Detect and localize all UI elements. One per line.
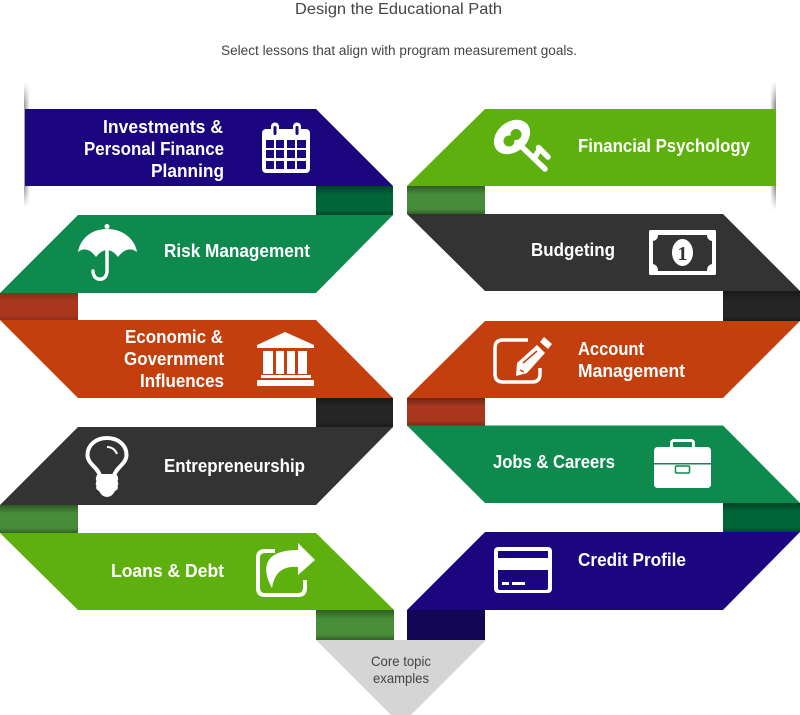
fold: dark to orange right (723, 291, 800, 321)
icon: key (487, 113, 548, 169)
panel: entrepreneurship (0, 427, 393, 505)
fold: orange to green right (407, 398, 485, 426)
panel: jobs and careers: Jobs & Careers (493, 452, 615, 472)
icon: dollar bill (649, 230, 716, 275)
panel: investments and personal finance planning: Personal Finance (84, 139, 224, 159)
icon: light bulb (88, 438, 126, 497)
fold: lime to dark right (407, 186, 485, 214)
fold: navy to green left (316, 186, 393, 215)
fold: green to orange left (0, 293, 78, 320)
panel: account management: Management (578, 361, 685, 381)
fold: green to navy right (723, 503, 800, 532)
icon: credit card (494, 547, 552, 593)
panel: core topic examples: examples (373, 670, 429, 686)
panel: loans and debt: Loans & Debt (111, 561, 224, 581)
panel: risk management (0, 215, 393, 293)
panel: economic and government influences: Government (124, 349, 224, 369)
panel: budgeting (407, 214, 800, 291)
panel: jobs and careers (407, 426, 800, 503)
icon: briefcase (654, 440, 711, 488)
icon: calendar (262, 122, 310, 173)
panel: core topic examples: Core topic (371, 653, 431, 669)
right edge shadow (769, 82, 777, 210)
panel: credit profile: Credit Profile (578, 550, 686, 570)
icon: umbrella (78, 224, 137, 279)
panel: financial psychology (407, 109, 776, 186)
panel: loans and debt (0, 533, 394, 610)
panel: account management: Account (578, 339, 644, 359)
fold: navy to triangle (407, 610, 485, 640)
panel: economic and government influences: Economic & (125, 327, 223, 347)
subtitle: Select lessons that align with program measurement goals. (221, 43, 577, 58)
panel: economic and government influences: Influences (140, 371, 224, 391)
panel: economic and government influences (0, 320, 393, 398)
icon: share arrow (258, 543, 315, 595)
panel: investments and personal finance planning: Planning (151, 161, 224, 181)
panel: investments and personal finance planning: Investments & (103, 117, 223, 137)
panel: investments and personal finance planning (25, 109, 393, 186)
left edge shadow (23, 82, 31, 207)
panel: credit profile (407, 532, 800, 610)
fold: lime to triangle (316, 610, 394, 640)
panel: core topic examples (316, 640, 486, 715)
icon: government building (257, 332, 314, 386)
panel: risk management: Risk Management (164, 241, 310, 261)
fold: dark to lime left (0, 505, 78, 533)
icon: pencil and box (495, 337, 552, 382)
fold: orange to dark left (316, 398, 393, 427)
panel: account management (407, 321, 800, 398)
panel: financial psychology: Financial Psychology (578, 136, 750, 156)
icon: dollar bill: 1 (678, 243, 688, 265)
panel: entrepreneurship: Entrepreneurship (164, 456, 305, 476)
title: Design the Educational Path (295, 1, 502, 18)
panel: budgeting: Budgeting (531, 240, 615, 260)
